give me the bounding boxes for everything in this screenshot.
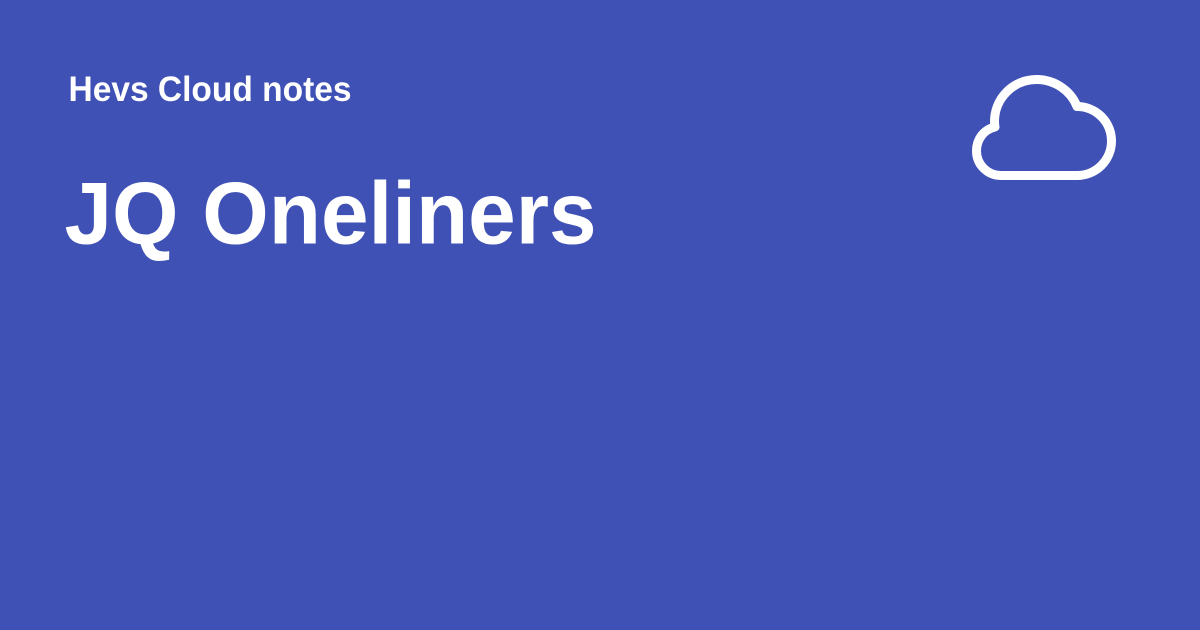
site name: Hevs Cloud notes — [68, 70, 352, 109]
icon: cloud — [976, 80, 1112, 176]
title: JQ Oneliners — [64, 164, 596, 262]
